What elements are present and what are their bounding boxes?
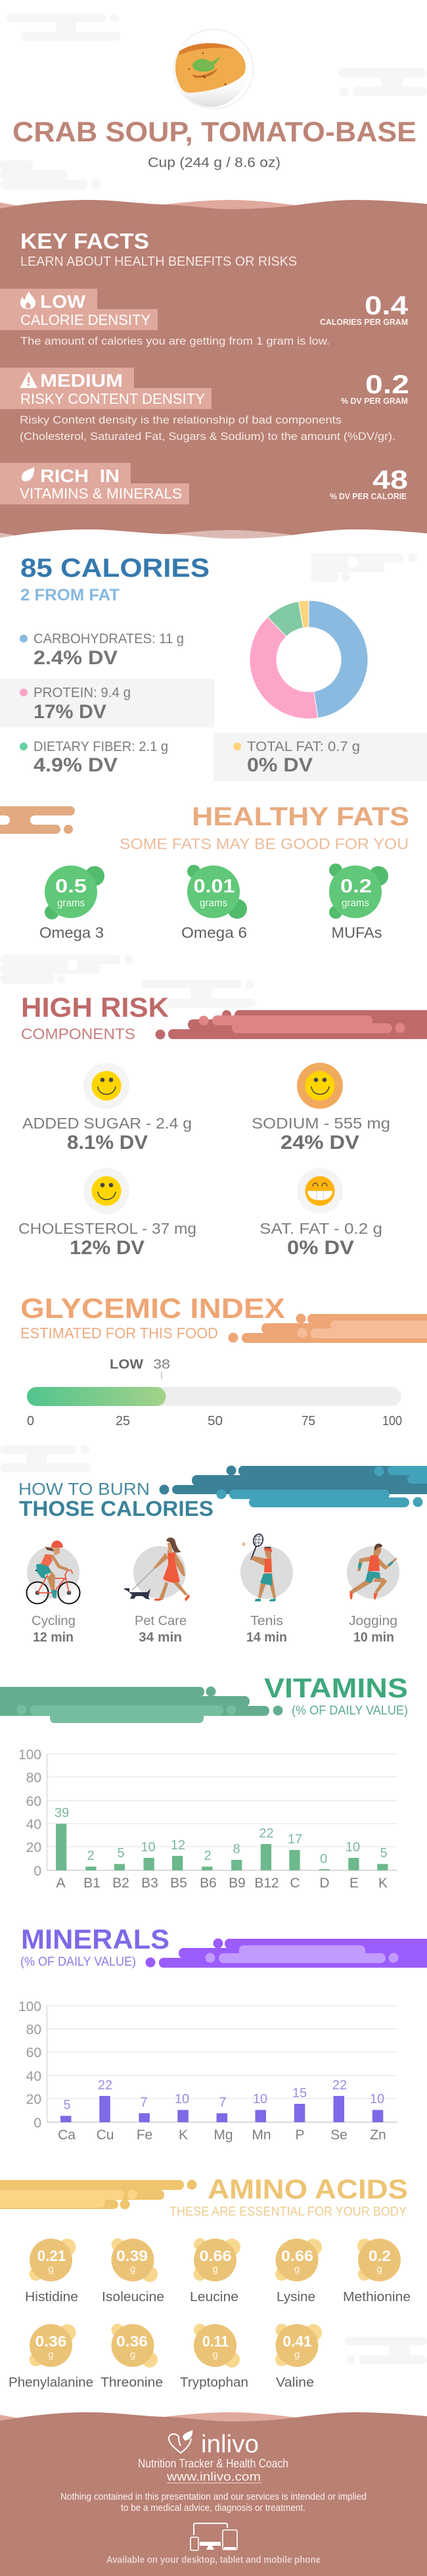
bar chart: minerals: 10 bbox=[253, 2092, 267, 2106]
bar chart: vitamins: K bbox=[378, 1876, 388, 1891]
glycemic scale: 100 bbox=[382, 1414, 402, 1428]
badge: histidine: Histidine bbox=[25, 2290, 78, 2304]
bar chart: minerals: P bbox=[295, 2127, 305, 2143]
activity: tennis bbox=[240, 1533, 293, 1645]
legend: total fat bbox=[233, 739, 360, 776]
bar chart: minerals: 15 bbox=[292, 2086, 307, 2101]
panel: minerals bbox=[18, 1924, 427, 2143]
fact: medium risky content density: (Cholesterol, Saturated Fat, Sugars & Sodium) to the amount (%DV/gr). bbox=[20, 430, 395, 443]
fact: low calorie density: CALORIE DENSITY bbox=[20, 312, 150, 328]
badge: omega 3: Omega 3 bbox=[39, 924, 104, 941]
bar chart: vitamins: 10 bbox=[346, 1840, 360, 1855]
bar chart: minerals: Mn bbox=[252, 2127, 271, 2143]
badge: valine: g bbox=[294, 2349, 300, 2360]
activity: jogging: Jogging bbox=[349, 1614, 397, 1628]
activity: jogging bbox=[347, 1543, 399, 1645]
panel: healthy fats bbox=[0, 802, 409, 941]
disclaimer bbox=[60, 2492, 367, 2514]
fact: medium risky content density: RISKY CONTENT DENSITY bbox=[20, 391, 205, 407]
bar chart: vitamins: 2 bbox=[87, 1849, 95, 1863]
legend: carbohydrates bbox=[20, 631, 184, 669]
bar chart: vitamins: 10 bbox=[141, 1840, 156, 1855]
tagline: Nutrition Tracker & Health Coach bbox=[138, 2457, 288, 2470]
activity: cycling: Cycling bbox=[32, 1614, 76, 1628]
item: cholesterol bbox=[18, 1168, 196, 1259]
bar chart: vitamins: 39 bbox=[55, 1806, 69, 1820]
fact: medium risky content density: % DV PER GRAM bbox=[341, 396, 408, 406]
bar chart: vitamins: B12 bbox=[254, 1876, 279, 1891]
badge: omega 6 bbox=[181, 865, 247, 941]
badge: MUFAs: grams bbox=[342, 898, 369, 909]
badge: threonine: 0.36 bbox=[116, 2333, 148, 2350]
panel: amino acids bbox=[0, 2174, 411, 2390]
legend: dietary fiber: 4.9% DV bbox=[34, 754, 118, 776]
minerals subheading: (% OF DAILY VALUE) bbox=[20, 1955, 136, 1969]
legend: dietary fiber: DIETARY FIBER: 2.1 g bbox=[34, 739, 168, 754]
bar chart: minerals: Mg bbox=[214, 2127, 233, 2143]
bar chart: minerals: 7 bbox=[140, 2095, 148, 2110]
badge: MUFAs: MUFAs bbox=[331, 924, 382, 941]
item: sodium: 24% DV bbox=[281, 1132, 359, 1154]
item: sodium: SODIUM - 555 mg bbox=[252, 1115, 390, 1132]
legend: total fat: 0% DV bbox=[247, 754, 313, 776]
badge: lysine: 0.66 bbox=[281, 2247, 313, 2264]
glycemic value label: LOW bbox=[110, 1357, 143, 1372]
logo: inlivo bbox=[169, 2430, 259, 2458]
glycemic scale: 0 bbox=[27, 1414, 34, 1428]
badge: valine bbox=[275, 2324, 322, 2390]
bar chart: vitamins: D bbox=[319, 1876, 330, 1891]
bar chart: minerals: 40 bbox=[26, 2069, 41, 2084]
item: added sugar: 8.1% DV bbox=[67, 1132, 148, 1154]
activity: cycling: 12 min bbox=[33, 1630, 74, 1645]
bar chart: vitamins: B5 bbox=[170, 1876, 187, 1891]
bar chart: vitamins: 100 bbox=[18, 1747, 41, 1762]
healthy fats subheading: SOME FATS MAY BE GOOD FOR YOU bbox=[120, 835, 409, 852]
badge: lysine bbox=[275, 2239, 322, 2304]
panel: high risk components bbox=[18, 992, 427, 1259]
badge: leucine: 0.66 bbox=[200, 2247, 231, 2264]
badge: isoleucine: Isoleucine bbox=[102, 2290, 164, 2304]
badge: leucine bbox=[190, 2239, 240, 2304]
donut chart bbox=[250, 600, 368, 719]
glycemic scale: 25 bbox=[116, 1414, 130, 1428]
legend: total fat: TOTAL FAT: 0.7 g bbox=[247, 739, 360, 754]
serving size: Cup (244 g / 8.6 oz) bbox=[148, 155, 281, 170]
fact: rich in vitamins and minerals: 48 bbox=[372, 466, 408, 495]
badge: omega 3: 0.5 bbox=[55, 876, 87, 897]
bar chart: minerals: 10 bbox=[370, 2092, 384, 2106]
bar chart: minerals: 60 bbox=[26, 2045, 41, 2060]
fact: rich in vitamins and minerals: % DV PER CALORIE bbox=[330, 491, 407, 501]
bar chart: vitamins: 12 bbox=[171, 1838, 185, 1853]
bar chart: vitamins: B6 bbox=[200, 1876, 217, 1891]
website link: www.inlivo.com bbox=[166, 2470, 261, 2483]
badge: isoleucine: g bbox=[130, 2264, 135, 2275]
badge: leucine: g bbox=[212, 2264, 218, 2275]
item: cholesterol: 12% DV bbox=[70, 1237, 145, 1259]
bar chart: vitamins: 5 bbox=[380, 1846, 388, 1860]
panel: key facts bbox=[0, 200, 427, 550]
fact: medium risky content density: MEDIUM bbox=[40, 370, 123, 391]
badge: phenylalanine: 0.36 bbox=[35, 2333, 67, 2350]
bar chart: vitamins: 0 bbox=[320, 1852, 327, 1866]
legend: protein: PROTEIN: 9.4 g bbox=[34, 685, 131, 700]
bar chart: vitamins bbox=[18, 1747, 397, 1891]
badge: omega 3 bbox=[39, 865, 104, 941]
activity: pet care: Pet Care bbox=[135, 1614, 187, 1628]
badge: MUFAs: 0.2 bbox=[340, 876, 372, 897]
badge: histidine: g bbox=[48, 2264, 54, 2275]
bar chart: minerals: K bbox=[179, 2127, 188, 2143]
glycemic index heading: GLYCEMIC INDEX bbox=[20, 1293, 285, 1324]
glycemic scale: 50 bbox=[208, 1414, 223, 1428]
bar chart: minerals: 22 bbox=[98, 2078, 112, 2093]
bar chart: vitamins: 8 bbox=[233, 1842, 240, 1857]
bar chart: vitamins: 20 bbox=[26, 1840, 41, 1855]
panel: how to burn those calories bbox=[18, 1465, 427, 1645]
glycemic index subheading: ESTIMATED FOR THIS FOOD bbox=[20, 1324, 218, 1342]
badge: tryptophan: 0.11 bbox=[202, 2333, 229, 2350]
bar chart: minerals: 20 bbox=[26, 2092, 41, 2107]
bar chart: minerals: 100 bbox=[18, 1999, 41, 2014]
activity: pet care bbox=[124, 1538, 190, 1645]
activity: jogging: 10 min bbox=[353, 1630, 394, 1645]
badge: isoleucine: 0.39 bbox=[116, 2247, 148, 2264]
fact: rich in vitamins and minerals: RICH IN bbox=[40, 466, 120, 486]
bar chart: vitamins: 0 bbox=[34, 1864, 41, 1879]
badge: tryptophan bbox=[180, 2324, 248, 2390]
bar chart: minerals: 5 bbox=[63, 2098, 71, 2112]
decoration: yellow bars bbox=[0, 2179, 197, 2210]
legend: dietary fiber bbox=[20, 739, 168, 776]
fact: rich in vitamins and minerals: VITAMINS & MINERALS bbox=[20, 485, 182, 502]
badge: methionine: g bbox=[376, 2264, 382, 2275]
bar chart: minerals: Ca bbox=[58, 2127, 76, 2143]
bar chart: minerals bbox=[18, 1999, 397, 2143]
amino acids heading: AMINO ACIDS bbox=[208, 2174, 408, 2204]
panel: calories bbox=[0, 554, 427, 781]
bar chart: minerals: 0 bbox=[34, 2116, 41, 2131]
bar chart: minerals: 7 bbox=[219, 2095, 227, 2110]
bar chart: vitamins: B1 bbox=[83, 1876, 101, 1891]
bar chart: vitamins: 2 bbox=[204, 1849, 212, 1863]
bar chart: minerals: 10 bbox=[175, 2092, 189, 2106]
activity: cycling bbox=[26, 1540, 80, 1645]
badge: threonine: Threonine bbox=[101, 2375, 163, 2390]
decoration: teal bars bbox=[159, 1465, 427, 1507]
badge: valine: 0.41 bbox=[282, 2333, 312, 2350]
glycemic value label bbox=[110, 1357, 170, 1379]
title: CRAB SOUP, TOMATO-BASE bbox=[12, 116, 416, 148]
legend highlight panels bbox=[0, 679, 427, 781]
badge: threonine bbox=[101, 2324, 163, 2390]
bar chart: vitamins: 40 bbox=[26, 1817, 41, 1832]
badge: omega 6: grams bbox=[200, 898, 227, 909]
badge: methionine: Methionine bbox=[343, 2290, 411, 2304]
badge: tryptophan: g bbox=[212, 2349, 218, 2360]
key facts heading: KEY FACTS bbox=[20, 229, 149, 253]
vitamins subheading: (% OF DAILY VALUE) bbox=[292, 1704, 408, 1718]
legend: protein: 17% DV bbox=[34, 701, 106, 723]
disclaimer: Nothing contained in this presentation and our services is intended or implied bbox=[60, 2492, 367, 2502]
badge: phenylalanine bbox=[9, 2324, 93, 2390]
high risk heading: HIGH RISK bbox=[21, 992, 169, 1023]
badge: omega 6: 0.01 bbox=[193, 876, 235, 897]
badge: lysine: Lysine bbox=[277, 2290, 315, 2304]
fact: medium risky content density: Risky Content density is the relationship of bad components bbox=[20, 414, 342, 426]
item: saturated fat: 0% DV bbox=[287, 1237, 354, 1259]
hero image: bowl of soup bbox=[173, 29, 254, 109]
bar chart: vitamins: E bbox=[349, 1876, 359, 1891]
bar chart: vitamins: 17 bbox=[288, 1832, 302, 1847]
panel: glycemic index bbox=[20, 1293, 427, 1428]
vitamins heading: VITAMINS bbox=[264, 1672, 408, 1703]
calories subheading: 2 FROM FAT bbox=[20, 586, 120, 604]
bar chart: vitamins: B2 bbox=[112, 1876, 129, 1891]
glycemic scale bbox=[27, 1414, 402, 1428]
bar chart: minerals: Zn bbox=[370, 2127, 386, 2143]
bar chart: minerals: Cu bbox=[97, 2127, 114, 2143]
decoration: peach bars bbox=[0, 806, 75, 834]
icon: devices bbox=[191, 2523, 237, 2550]
decoration: green bars bbox=[0, 1686, 282, 1723]
fact: medium risky content density: 0.2 bbox=[365, 370, 409, 399]
logo: inlivo: inlivo bbox=[201, 2431, 259, 2458]
fact: low calorie density: CALORIES PER GRAM bbox=[320, 317, 408, 327]
glycemic scale: 75 bbox=[302, 1414, 315, 1428]
activity: tennis: 14 min bbox=[246, 1630, 287, 1645]
badge: histidine: 0.21 bbox=[37, 2247, 66, 2264]
disclaimer: to be a medical advice, diagnosis or treatment. bbox=[121, 2503, 305, 2514]
badge: omega 6: Omega 6 bbox=[181, 924, 247, 941]
badge: tryptophan: Tryptophan bbox=[180, 2375, 248, 2390]
burn heading line 2: THOSE CALORIES bbox=[19, 1497, 214, 1520]
badge: histidine bbox=[25, 2239, 78, 2304]
key facts subheading: LEARN ABOUT HEALTH BENEFITS OR RISKS bbox=[20, 255, 297, 269]
badge: phenylalanine: g bbox=[48, 2349, 54, 2360]
bar chart: minerals: 80 bbox=[26, 2022, 41, 2037]
legend: carbohydrates: 2.4% DV bbox=[34, 647, 118, 669]
healthy fats heading: HEALTHY FATS bbox=[192, 802, 409, 831]
burn heading line 1: HOW TO BURN bbox=[18, 1479, 150, 1499]
fact: low calorie density: LOW bbox=[40, 291, 86, 312]
bar chart: vitamins: 80 bbox=[26, 1770, 41, 1786]
fact: rich in vitamins and minerals bbox=[0, 463, 408, 504]
item: added sugar: ADDED SUGAR - 2.4 g bbox=[22, 1115, 192, 1132]
panel: vitamins bbox=[0, 1672, 408, 1891]
calories heading: 85 CALORIES bbox=[20, 554, 210, 583]
fact: low calorie density: 0.4 bbox=[365, 291, 409, 320]
badge: MUFAs bbox=[329, 863, 388, 941]
bar chart: minerals: 22 bbox=[332, 2078, 347, 2093]
legend: carbohydrates: CARBOHYDRATES: 11 g bbox=[34, 631, 184, 646]
bar chart: vitamins: 22 bbox=[259, 1826, 274, 1841]
fact: medium risky content density bbox=[0, 368, 409, 443]
high risk subheading: COMPONENTS bbox=[21, 1025, 135, 1042]
badge: valine: Valine bbox=[276, 2375, 314, 2390]
panel: footer bbox=[0, 2412, 427, 2576]
glycemic value label: 38 bbox=[153, 1357, 170, 1372]
badge: methionine bbox=[343, 2239, 411, 2304]
decoration: orange bars bbox=[229, 1314, 427, 1343]
item: sodium bbox=[252, 1063, 390, 1154]
bar chart: vitamins: C bbox=[290, 1876, 300, 1891]
bar chart: vitamins: B3 bbox=[141, 1876, 158, 1891]
badge: lysine: g bbox=[294, 2264, 300, 2275]
amino acids subheading: THESE ARE ESSENTIAL FOR YOUR BODY bbox=[169, 2205, 407, 2219]
availability note: Available on your desktop, tablet and mobile phone bbox=[106, 2555, 321, 2565]
item: cholesterol: CHOLESTEROL - 37 mg bbox=[18, 1220, 196, 1237]
badge: phenylalanine: Phenylalanine bbox=[9, 2375, 93, 2390]
activity: pet care: 34 min bbox=[139, 1630, 182, 1645]
badge: leucine: Leucine bbox=[190, 2290, 238, 2304]
decoration: purple bars bbox=[146, 1939, 427, 1968]
badge: methionine: 0.2 bbox=[369, 2247, 391, 2264]
fact: low calorie density: The amount of calories you are getting from 1 gram is low. bbox=[20, 335, 330, 347]
badge: isoleucine bbox=[102, 2239, 164, 2304]
fact: low calorie density bbox=[0, 289, 409, 347]
badge: omega 3: grams bbox=[57, 898, 85, 909]
item: saturated fat bbox=[259, 1168, 382, 1259]
bar chart: vitamins: 60 bbox=[26, 1794, 41, 1809]
decoration: red bars bbox=[155, 1010, 427, 1039]
bar chart: vitamins: 5 bbox=[117, 1846, 125, 1860]
item: saturated fat: SAT. FAT - 0.2 g bbox=[259, 1220, 382, 1237]
legend: protein bbox=[20, 685, 131, 723]
bar chart: minerals: Se bbox=[330, 2127, 348, 2143]
minerals heading: MINERALS bbox=[21, 1924, 169, 1955]
glycemic progress bar bbox=[27, 1387, 401, 1406]
bar chart: vitamins: B9 bbox=[229, 1876, 246, 1891]
badge: threonine: g bbox=[130, 2349, 135, 2360]
activity: tennis: Tenis bbox=[250, 1614, 283, 1628]
bar chart: minerals: Fe bbox=[137, 2127, 152, 2143]
bar chart: vitamins: A bbox=[56, 1876, 66, 1891]
item: added sugar bbox=[22, 1063, 192, 1154]
